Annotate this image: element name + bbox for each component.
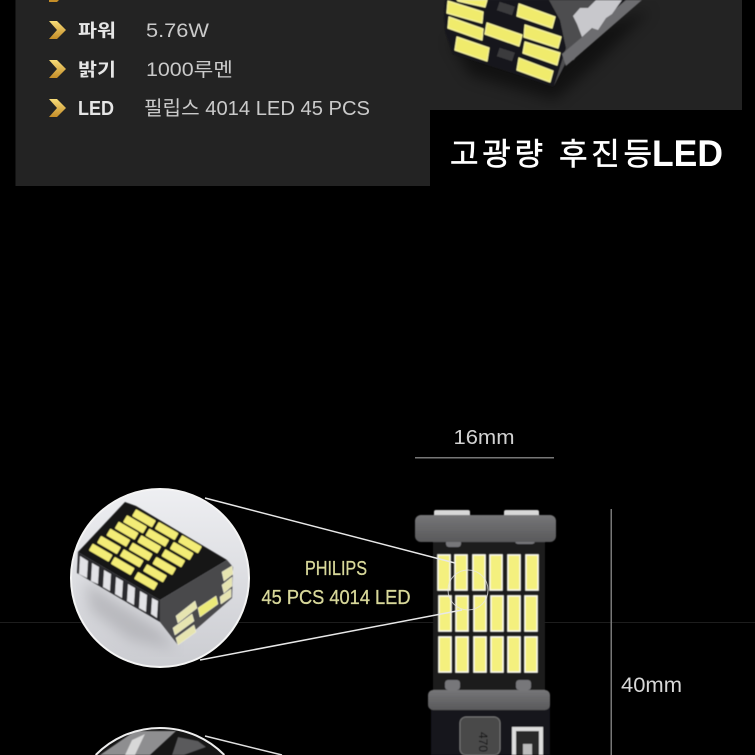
top contacts <box>434 510 539 517</box>
shadow <box>85 580 175 650</box>
spec row: brightness: 밝기 <box>78 60 116 80</box>
end cap <box>160 560 233 645</box>
top chevron remnant <box>49 0 59 2</box>
inductor: 470 <box>476 732 490 752</box>
side fins <box>77 552 160 622</box>
spec row: LED: 필립스 4014 LED 45 PCS <box>144 97 370 120</box>
callout label <box>262 558 410 609</box>
lower board <box>431 705 550 755</box>
top collar <box>415 515 556 542</box>
spec list <box>49 21 370 120</box>
dimension: height: 40mm <box>621 674 682 697</box>
spec row: power: 파워 <box>78 21 116 41</box>
callout line: lower detail <box>205 736 282 755</box>
spec row: LED: LED <box>78 98 114 120</box>
circuit board <box>433 535 545 695</box>
zoom circle: lower detail <box>96 728 224 755</box>
spec row: power <box>49 21 209 42</box>
white connector <box>512 727 543 755</box>
heading: 고광량 후진등 <box>450 137 652 172</box>
callout label: PHILIPS <box>305 558 367 580</box>
end cap LEDs <box>173 566 233 645</box>
bulb photo: front view <box>415 510 556 755</box>
spec row: brightness <box>49 59 233 81</box>
LED array <box>438 555 538 672</box>
callout lines: upper detail <box>200 498 488 660</box>
spec row: power: 5.76W <box>146 21 209 42</box>
dimension: width: 16mm <box>454 427 514 449</box>
bulb photo: top <box>444 0 650 100</box>
callout label: 45 PCS 4014 LED <box>262 587 410 609</box>
board solder details <box>445 534 535 690</box>
heading <box>450 133 723 174</box>
zoom circle: upper detail <box>71 489 249 667</box>
heading: LED <box>652 133 723 174</box>
bottom collar <box>428 690 550 710</box>
inductor <box>460 717 500 755</box>
spec row: brightness: 1000루멘 <box>146 59 233 81</box>
spec row: LED <box>49 97 370 120</box>
dimension: width <box>415 427 554 458</box>
panel: specifications <box>16 0 742 186</box>
board top <box>78 502 227 600</box>
top LED grid <box>89 509 202 590</box>
faint horizontal guide line <box>0 622 755 623</box>
